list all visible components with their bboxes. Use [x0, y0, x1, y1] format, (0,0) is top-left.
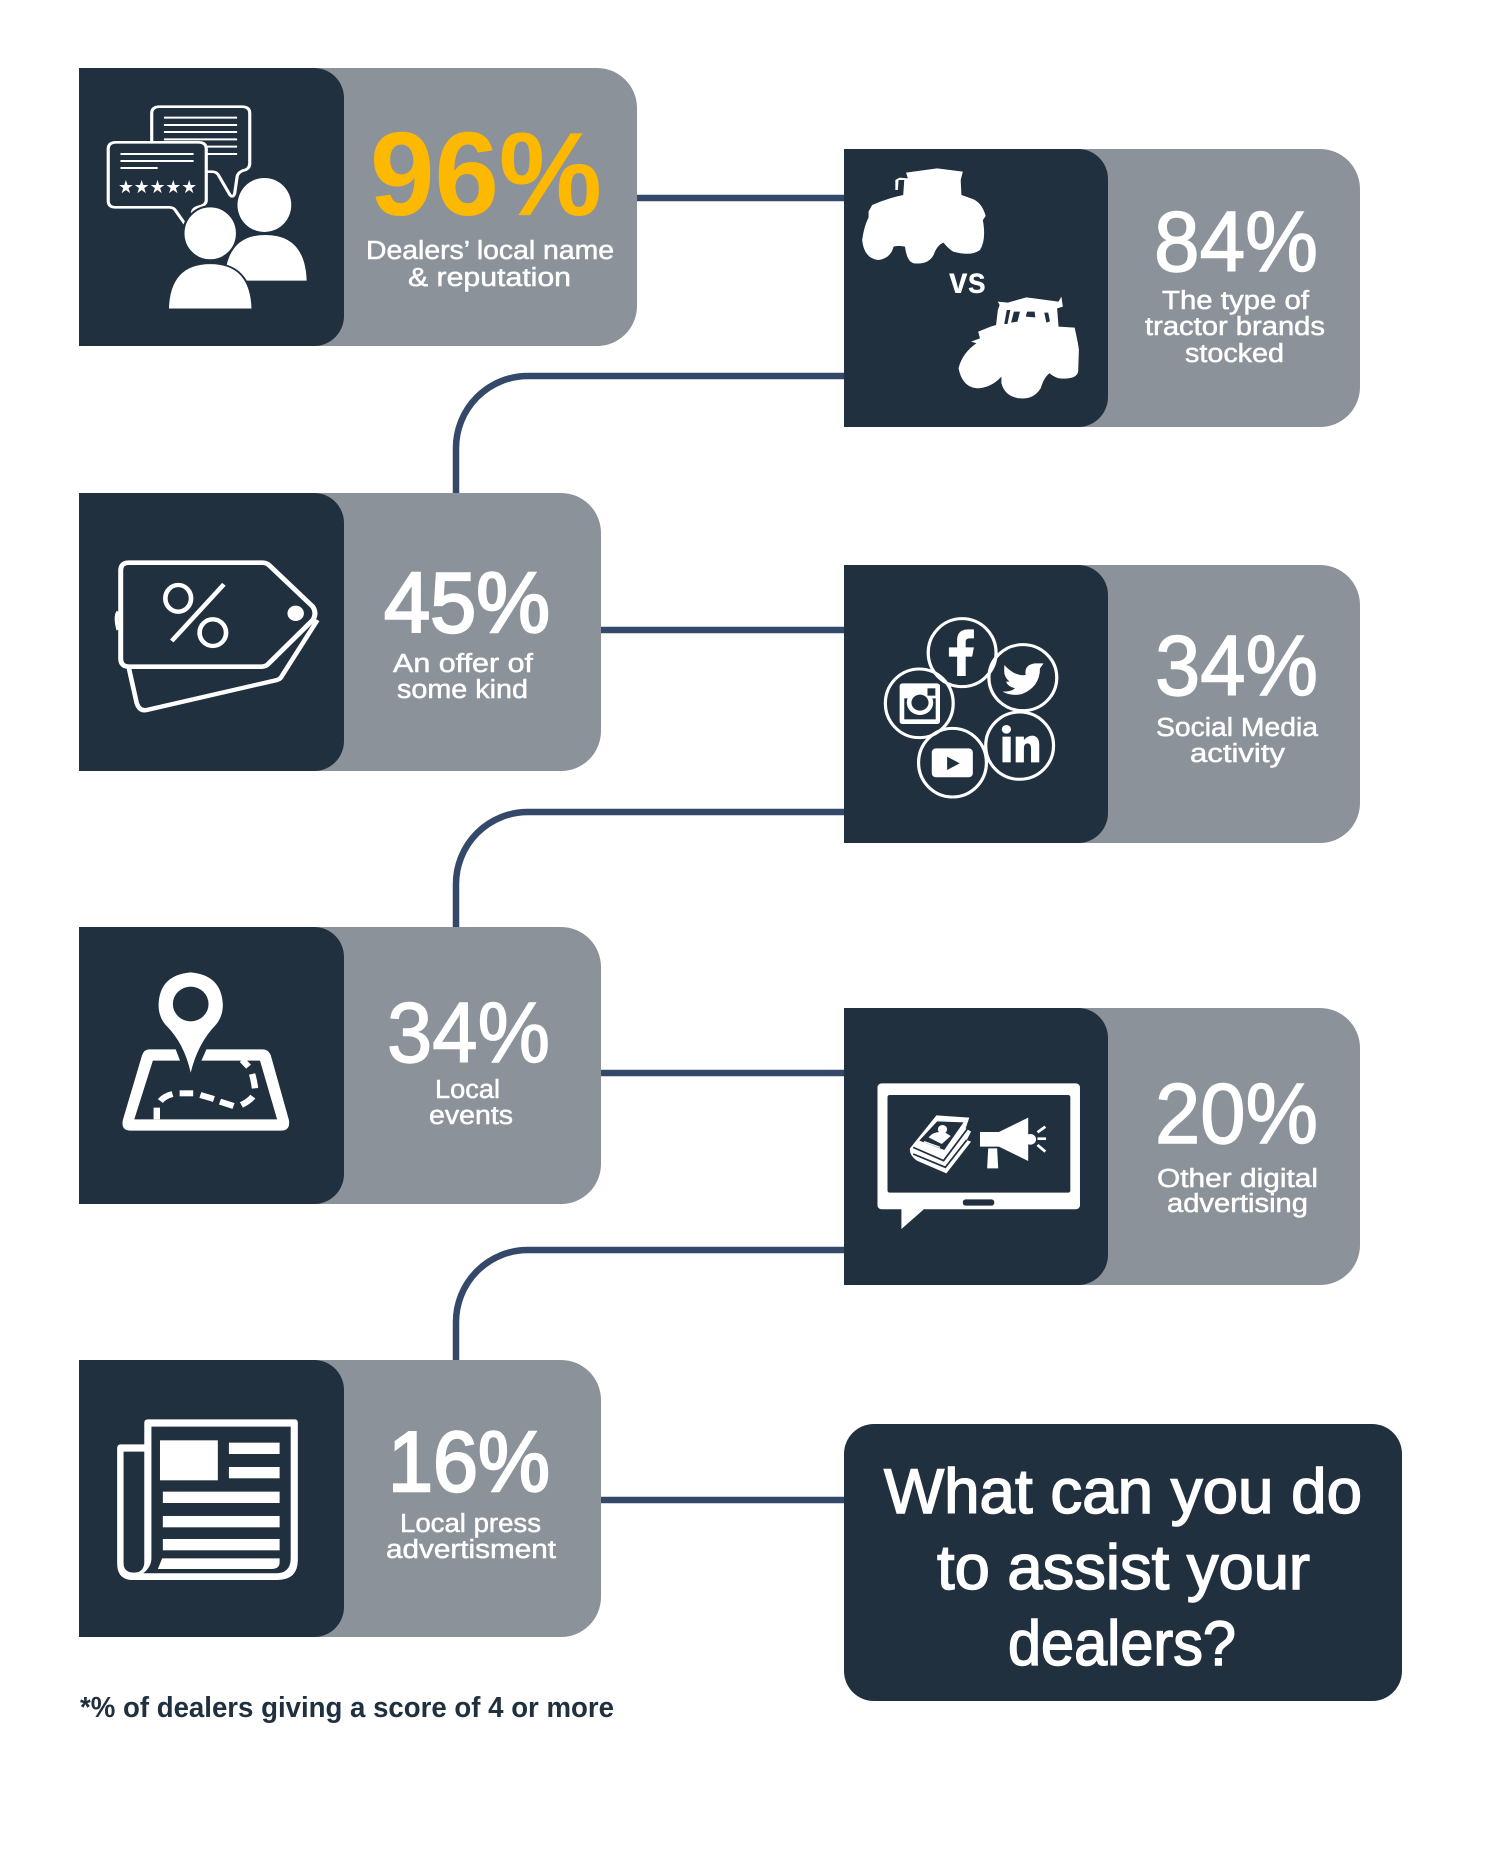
- label: advertising: [1167, 1190, 1308, 1218]
- panel: type of tractor brands 84%: [844, 149, 1360, 427]
- statistic 34%: 34%: [1155, 619, 1318, 714]
- panel background: [844, 565, 1360, 843]
- icon tile: [844, 565, 1108, 843]
- panel background: [79, 927, 601, 1204]
- footnote: *% of dealers giving a score of 4 or more: [80, 1692, 614, 1724]
- label: stocked: [1185, 340, 1284, 368]
- label: [1157, 1165, 1318, 1218]
- callout background: [844, 1424, 1402, 1701]
- callout text: What can you do: [884, 1457, 1362, 1527]
- vs label: vs: [949, 260, 986, 301]
- label: Local press: [400, 1510, 541, 1538]
- icon: tablet with magazines and megaphone: [877, 1083, 1080, 1229]
- statistic 20%: 20%: [1155, 1067, 1318, 1162]
- panel: dealers local name and reputation 96%: [79, 68, 637, 346]
- panel background: [79, 1360, 601, 1637]
- statistic 84%: 84%: [1154, 195, 1318, 290]
- callout text: to assist your: [937, 1533, 1310, 1603]
- icon: newspaper: [117, 1419, 298, 1580]
- panel: local press advertisment 16%: [79, 1360, 601, 1637]
- label: events: [429, 1102, 513, 1130]
- panel: an offer of some kind 45%: [79, 493, 601, 771]
- connector lines: [456, 198, 844, 1500]
- panel: other digital advertising 20%: [844, 1008, 1360, 1285]
- label: advertisment: [386, 1536, 556, 1564]
- callout text: dealers?: [1008, 1609, 1236, 1679]
- icon: tractor silhouette two: [959, 297, 1079, 399]
- icon: tractor silhouette one: [862, 168, 986, 264]
- icon tile: [844, 149, 1108, 427]
- label: activity: [1190, 740, 1285, 768]
- icon tile: [79, 1360, 344, 1637]
- icon: map with location pin: [122, 972, 289, 1131]
- panel: social media activity 34%: [844, 565, 1360, 843]
- icon tile: [79, 493, 344, 771]
- statistic 16%: 16%: [388, 1415, 550, 1510]
- label: The type of: [1162, 287, 1310, 315]
- icon: price tags: [116, 563, 317, 710]
- label: [429, 1076, 513, 1130]
- panel: local events 34%: [79, 927, 601, 1204]
- icon: social media circles: [885, 619, 1057, 797]
- label: Local: [435, 1076, 500, 1104]
- callout: what can you do: [844, 1424, 1402, 1701]
- icon tile: [79, 68, 344, 346]
- statistic 45%: 45%: [384, 556, 550, 651]
- label: some kind: [397, 676, 528, 704]
- icon tile: [844, 1008, 1108, 1285]
- label: Social Media: [1156, 714, 1319, 742]
- panel background: [844, 1008, 1360, 1285]
- label: [1156, 714, 1319, 768]
- label: [393, 650, 534, 704]
- icon: reviews and people: [108, 107, 307, 309]
- label: [386, 1510, 556, 1564]
- label: tractor brands: [1145, 313, 1325, 341]
- panel background: [844, 149, 1360, 427]
- statistic 96%: 96%: [370, 108, 602, 241]
- label: [1145, 287, 1325, 368]
- panel background: [79, 68, 637, 346]
- icon: five stars: ★★★★★: [118, 177, 197, 198]
- label: [366, 237, 614, 292]
- callout text: [884, 1457, 1362, 1679]
- panel background: [79, 493, 601, 771]
- label: Other digital: [1157, 1165, 1318, 1193]
- statistic 34%: 34%: [387, 986, 550, 1081]
- label: An offer of: [393, 650, 534, 678]
- label: & reputation: [408, 264, 571, 292]
- icon tile: [79, 927, 344, 1204]
- label: Dealers’ local name: [366, 237, 614, 265]
